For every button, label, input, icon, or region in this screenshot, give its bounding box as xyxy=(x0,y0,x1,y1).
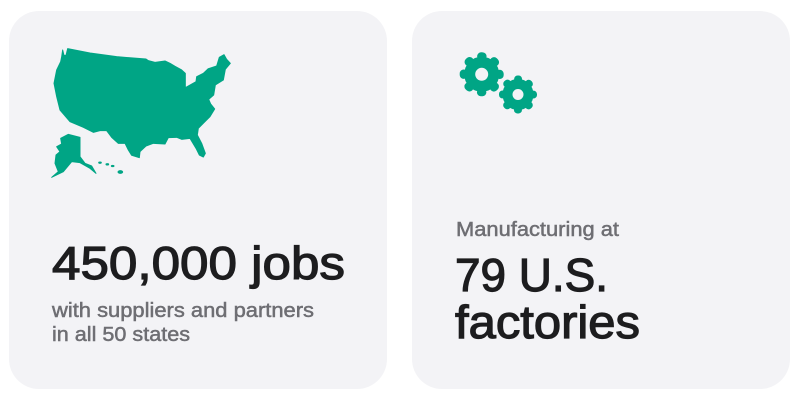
heading: 79 U.S. factories: 79 U.S. xyxy=(455,249,608,301)
icon: gears xyxy=(464,56,534,110)
panel: jobs xyxy=(9,11,387,389)
heading: 79 U.S. factories: factories xyxy=(455,296,640,348)
icon: United States map xyxy=(52,49,230,177)
panel: factories xyxy=(412,11,790,389)
text: suppliers description: with suppliers and partners xyxy=(51,300,314,322)
text: manufacturing at: Manufacturing at xyxy=(456,219,619,241)
heading: 450,000 jobs: 450,000 jobs xyxy=(52,237,345,289)
text: suppliers description: in all 50 states xyxy=(52,324,190,346)
